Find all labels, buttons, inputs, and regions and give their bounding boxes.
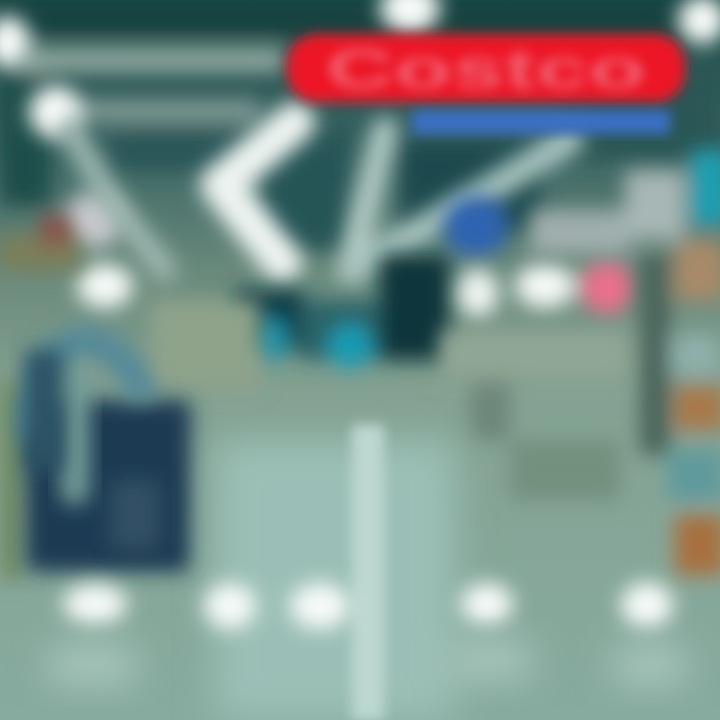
shopping bag bbox=[25, 341, 191, 572]
dark central aisle bbox=[235, 255, 450, 368]
floor lights bbox=[63, 582, 673, 629]
ceiling lights bbox=[0, 0, 720, 308]
blue circle sign bbox=[444, 196, 508, 256]
hanging signs bbox=[458, 260, 634, 317]
right shelves bbox=[440, 150, 720, 575]
floor lower highlights bbox=[50, 640, 685, 685]
blue sign strip bbox=[412, 110, 670, 134]
sign: red store sign: Costco bbox=[326, 37, 646, 100]
left shelves bbox=[0, 215, 260, 580]
sign: red store sign bbox=[287, 34, 685, 102]
ceiling bbox=[0, 0, 720, 250]
diagonal light beams bbox=[70, 122, 570, 272]
floor reflection bbox=[215, 440, 455, 720]
floor highlight strip bbox=[352, 425, 384, 720]
